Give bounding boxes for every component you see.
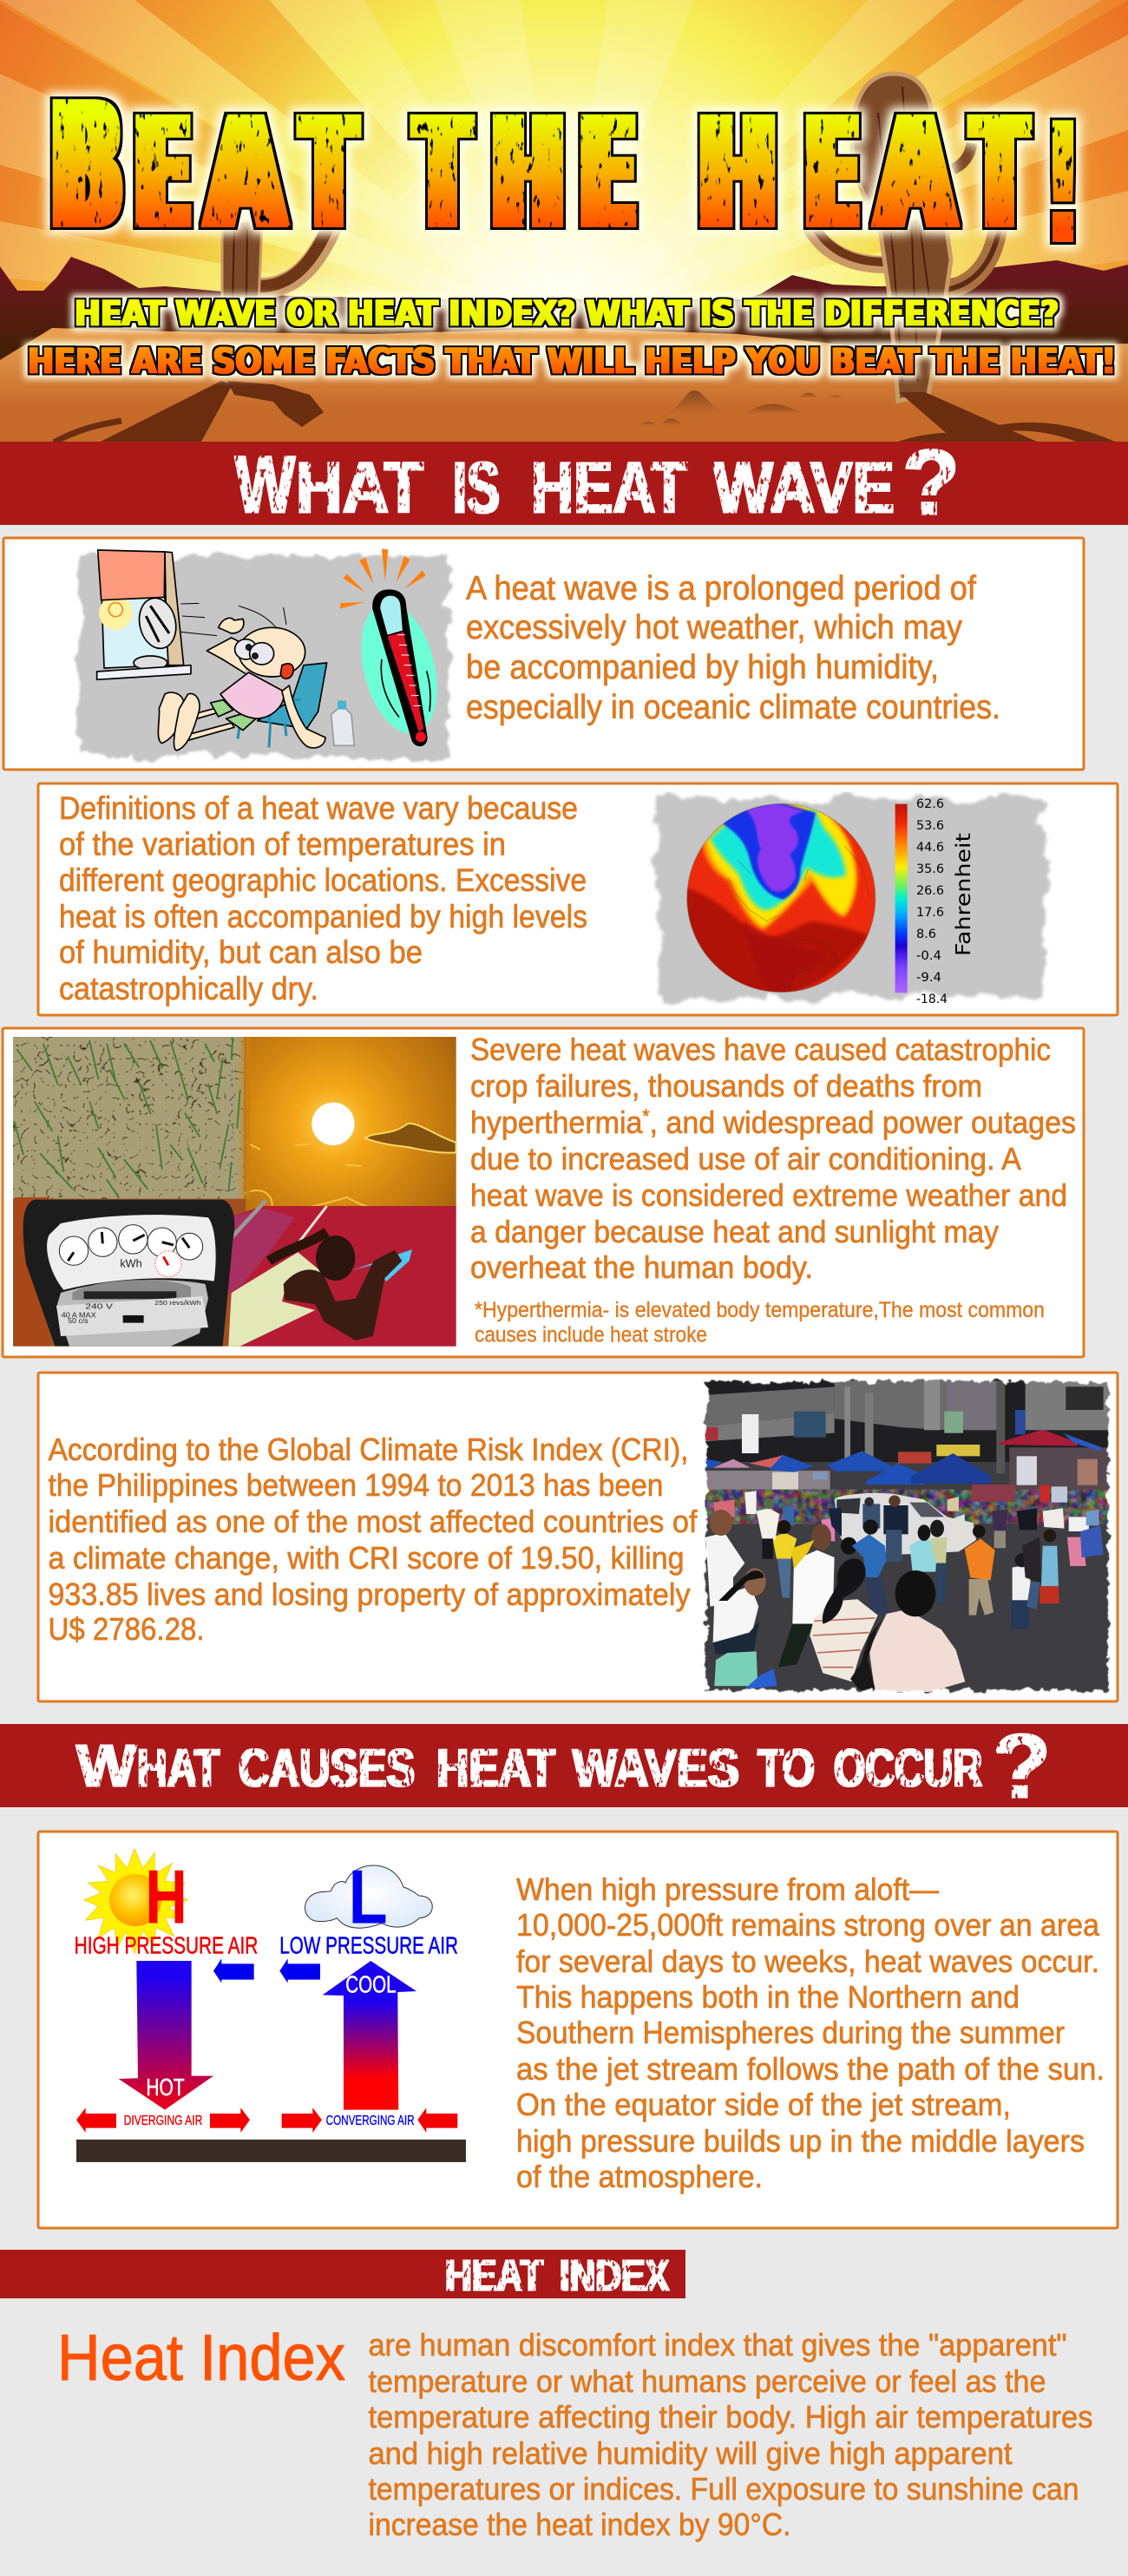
- causes text: [516, 1871, 1105, 2194]
- title: Beat the Heat!: E: [136, 85, 189, 263]
- colour scale labels: 26.6: [916, 884, 944, 898]
- climate risk text: [49, 1432, 698, 1647]
- colour scale labels: 53.6: [916, 819, 944, 833]
- heading text: WAVES: [573, 1739, 739, 1799]
- heading text: HAT: [296, 447, 423, 528]
- title: Beat the Heat!: A: [878, 85, 953, 263]
- heading text: INDEX: [560, 2251, 669, 2300]
- mountains: [0, 257, 1128, 364]
- electric meter: [15, 1197, 234, 1347]
- definitions text: heat is often accompanied by high levels: [59, 899, 587, 934]
- heading text: OCCUR: [834, 1739, 982, 1799]
- causes text: of the atmosphere.: [516, 2159, 763, 2194]
- climate risk text: U$ 2786.28.: [49, 1611, 205, 1647]
- causes text: high pressure builds up in the middle layers: [516, 2123, 1085, 2159]
- heat index term: Heat Index: [57, 2321, 345, 2394]
- definitions text: Definitions of a heat wave vary because: [59, 790, 578, 826]
- section banner: what is heat wave: [0, 429, 1128, 534]
- runner: [228, 1232, 412, 1347]
- heading text: ?: [902, 429, 960, 534]
- definitions text: different geographic locations. Excessive: [59, 862, 587, 898]
- converging air label: CONVERGING AIR: [326, 2114, 415, 2128]
- definitions text: [59, 790, 587, 1006]
- heading text: ?: [993, 1715, 1051, 1818]
- causes text: as the jet stream follows the path of the sun.: [516, 2051, 1105, 2087]
- photo collage: [13, 1037, 456, 1347]
- high pressure label: HIGH PRESSURE AIR: [75, 1932, 258, 1959]
- heading text: IS: [453, 447, 500, 528]
- severe heat waves text: hyperthermia: [470, 1104, 653, 1140]
- electric meter: 240 V: [85, 1301, 114, 1310]
- severe heat waves text: Severe heat waves have caused catastrophic: [470, 1032, 1051, 1067]
- H label: H: [145, 1854, 187, 1940]
- colour scale labels: -18.4: [916, 993, 948, 1006]
- heat index explanation: and high relative humidity will give high apparent: [368, 2435, 1012, 2471]
- electric meter: 50 c/s: [68, 1317, 89, 1325]
- definition text: A heat wave is a prolonged period of: [466, 570, 976, 607]
- L label: L: [349, 1854, 388, 1940]
- electric meter: 40 A MAX: [62, 1311, 96, 1319]
- climate risk text: the Philippines between 1994 to 2013 has been: [49, 1467, 663, 1503]
- hyperthermia footnote: [475, 1298, 1045, 1347]
- title: Beat the Heat!: E: [581, 85, 634, 263]
- heat index explanation: temperature or what humans perceive or feel as the: [368, 2363, 1046, 2399]
- heading text: WAVE: [713, 447, 895, 528]
- heat index explanation: increase the heat index by 90°C.: [368, 2507, 791, 2542]
- road: [698, 1525, 1115, 1696]
- heading text: HEAT: [531, 447, 687, 528]
- title: Beat the Heat!: B: [52, 66, 121, 268]
- climate risk text: According to the Global Climate Risk Index (CRI),: [49, 1432, 689, 1467]
- panel: heat wave definition: [3, 538, 1084, 770]
- severe heat waves text: a danger because heat and sunlight may: [470, 1214, 999, 1249]
- arrow: rising air: [323, 1961, 416, 2110]
- electric meter: kWh: [120, 1258, 142, 1270]
- grey torn backdrop for globe: [658, 800, 1045, 998]
- colour scale labels: 8.6: [916, 927, 936, 941]
- colour scale labels: -9.4: [916, 971, 941, 985]
- severe heat waves text: crop failures, thousands of deaths from: [470, 1068, 982, 1104]
- police officers: [883, 1505, 908, 1534]
- causes text: This happens both in the Northern and: [516, 1979, 1020, 2015]
- left cactus: [222, 221, 331, 304]
- low pressure label: LOW PRESSURE AIR: [279, 1932, 458, 1959]
- hyperthermia footnote: *Hyperthermia- is elevated body temperature,The most common: [475, 1298, 1045, 1322]
- definitions text: of the variation of temperatures in: [59, 826, 506, 862]
- hyperthermia footnote: causes include heat stroke: [475, 1322, 707, 1347]
- distant mounds: [638, 390, 843, 425]
- signs: [742, 1414, 758, 1453]
- causes text: Southern Hemispheres during the summer: [516, 2015, 1065, 2050]
- definitions text: catastrophically dry.: [59, 971, 318, 1006]
- heading text: HEAT: [436, 1739, 555, 1799]
- heading text: HAT: [137, 1739, 220, 1799]
- pressure diagram: [75, 1849, 466, 2162]
- foreground people: [705, 1491, 1104, 1692]
- heat index explanation: temperature affecting their body. High air temperatures: [368, 2399, 1093, 2435]
- title: Beat the Heat!: T: [304, 85, 354, 263]
- carpet: [228, 1206, 456, 1347]
- section banner: heat index: [0, 2250, 685, 2300]
- grey torn backdrop: [80, 555, 449, 757]
- severe heat waves text: due to increased use of air conditioning. A: [470, 1141, 1021, 1177]
- colour scale bar: [895, 804, 908, 993]
- right cactus shadow: [898, 392, 1115, 442]
- desert ground: [0, 328, 1128, 442]
- electric meter: 250 revs/kWh: [154, 1299, 201, 1307]
- heading text: W: [76, 1732, 136, 1799]
- colour scale labels: 17.6: [916, 906, 944, 920]
- severe heat waves text: heat wave is considered extreme weather and: [470, 1177, 1067, 1213]
- climate risk text: 933.85 lives and losing property of approximately: [49, 1576, 691, 1612]
- icon: cloud: [305, 1865, 432, 1928]
- buildings: [698, 1386, 835, 1427]
- panel: Philippines climate risk: [38, 1373, 1118, 1701]
- heading text: TO: [757, 1739, 815, 1799]
- section banner: what causes heat waves: [0, 1715, 1128, 1818]
- definitions text: of humidity, but can also be: [59, 934, 423, 970]
- climate risk text: a climate change, with CRI score of 19.50, killing: [49, 1540, 684, 1576]
- arrows: surface air flow: [76, 2107, 457, 2133]
- market tents: [698, 1451, 924, 1485]
- ground bar: [76, 2140, 466, 2162]
- title: Beat the Heat!: T: [974, 85, 1025, 263]
- causes text: 10,000-25,000ft remains strong over an area: [516, 1907, 1100, 1943]
- panel: causes of heat waves: [38, 1832, 1118, 2228]
- climate risk text: identified as one of the most affected countries of: [49, 1504, 698, 1539]
- severe heat waves text: *: [642, 1105, 650, 1127]
- left cactus shadow: [54, 381, 324, 442]
- colour scale labels: 44.6: [916, 841, 944, 855]
- stalls and crowd band: [698, 1471, 830, 1497]
- white car: [835, 1493, 976, 1555]
- colour scale labels: 35.6: [916, 862, 944, 876]
- panel: definitions vary: [38, 783, 1118, 1015]
- illustration: overheated man with fan and thermometer: [97, 549, 449, 751]
- panel: severe heat waves: [3, 1028, 1084, 1357]
- COOL label: COOL: [345, 1971, 397, 1998]
- cracked soil: [13, 1037, 245, 1199]
- scale title: Fahrenheit: [953, 833, 975, 956]
- title: Beat the Heat!: A: [208, 85, 283, 263]
- heat index explanation: temperatures or indices. Full exposure to sunshine can: [368, 2471, 1079, 2507]
- definition text: excessively hot weather, which may: [466, 609, 962, 646]
- definition text: be accompanied by high humidity,: [466, 649, 939, 686]
- arrow: sinking air: [119, 1961, 213, 2110]
- colour scale labels: [916, 797, 948, 1006]
- causes text: On the equator side of the jet stream,: [516, 2087, 1011, 2122]
- title: Beat the Heat!: T: [417, 85, 468, 263]
- title: Beat the Heat!: H: [699, 85, 776, 263]
- severe heat waves text: , and widespread power outages: [650, 1104, 1076, 1140]
- sun sky: [246, 1037, 456, 1213]
- heading text: CAUSES: [239, 1739, 415, 1799]
- severe heat waves text: [470, 1032, 1076, 1285]
- photo: crowded Philippine street: [698, 1375, 1115, 1696]
- heat index explanation: [368, 2327, 1093, 2542]
- title: Beat the Heat!: H: [493, 85, 563, 263]
- header banner: [0, 0, 1128, 442]
- rice shoots: [15, 1039, 240, 1197]
- causes text: When high pressure from aloft—: [516, 1871, 939, 1907]
- arrows: upper air flow: [213, 1958, 320, 1983]
- diverging air label: DIVERGING AIR: [124, 2114, 202, 2128]
- temperature globe map: [683, 801, 908, 1010]
- definition text: [466, 570, 1000, 726]
- severe heat waves text: overheat the human body.: [470, 1249, 813, 1285]
- colour scale labels: 62.6: [916, 797, 944, 811]
- desert sunburst illustration: [0, 0, 1128, 442]
- title: Beat the Heat!: E: [807, 85, 857, 263]
- heat index explanation: are human discomfort index that gives the "apparent": [368, 2327, 1067, 2363]
- icon: sun: [84, 1849, 188, 1954]
- HOT label: HOT: [146, 2074, 185, 2101]
- heading text: HEAT: [445, 2251, 543, 2300]
- definition text: especially in oceanic climate countries.: [466, 689, 1000, 726]
- colour scale labels: -0.4: [916, 949, 941, 963]
- right cactus: [811, 74, 1000, 401]
- heading text: W: [235, 439, 295, 531]
- causes text: for several days to weeks, heat waves occur.: [516, 1943, 1099, 1979]
